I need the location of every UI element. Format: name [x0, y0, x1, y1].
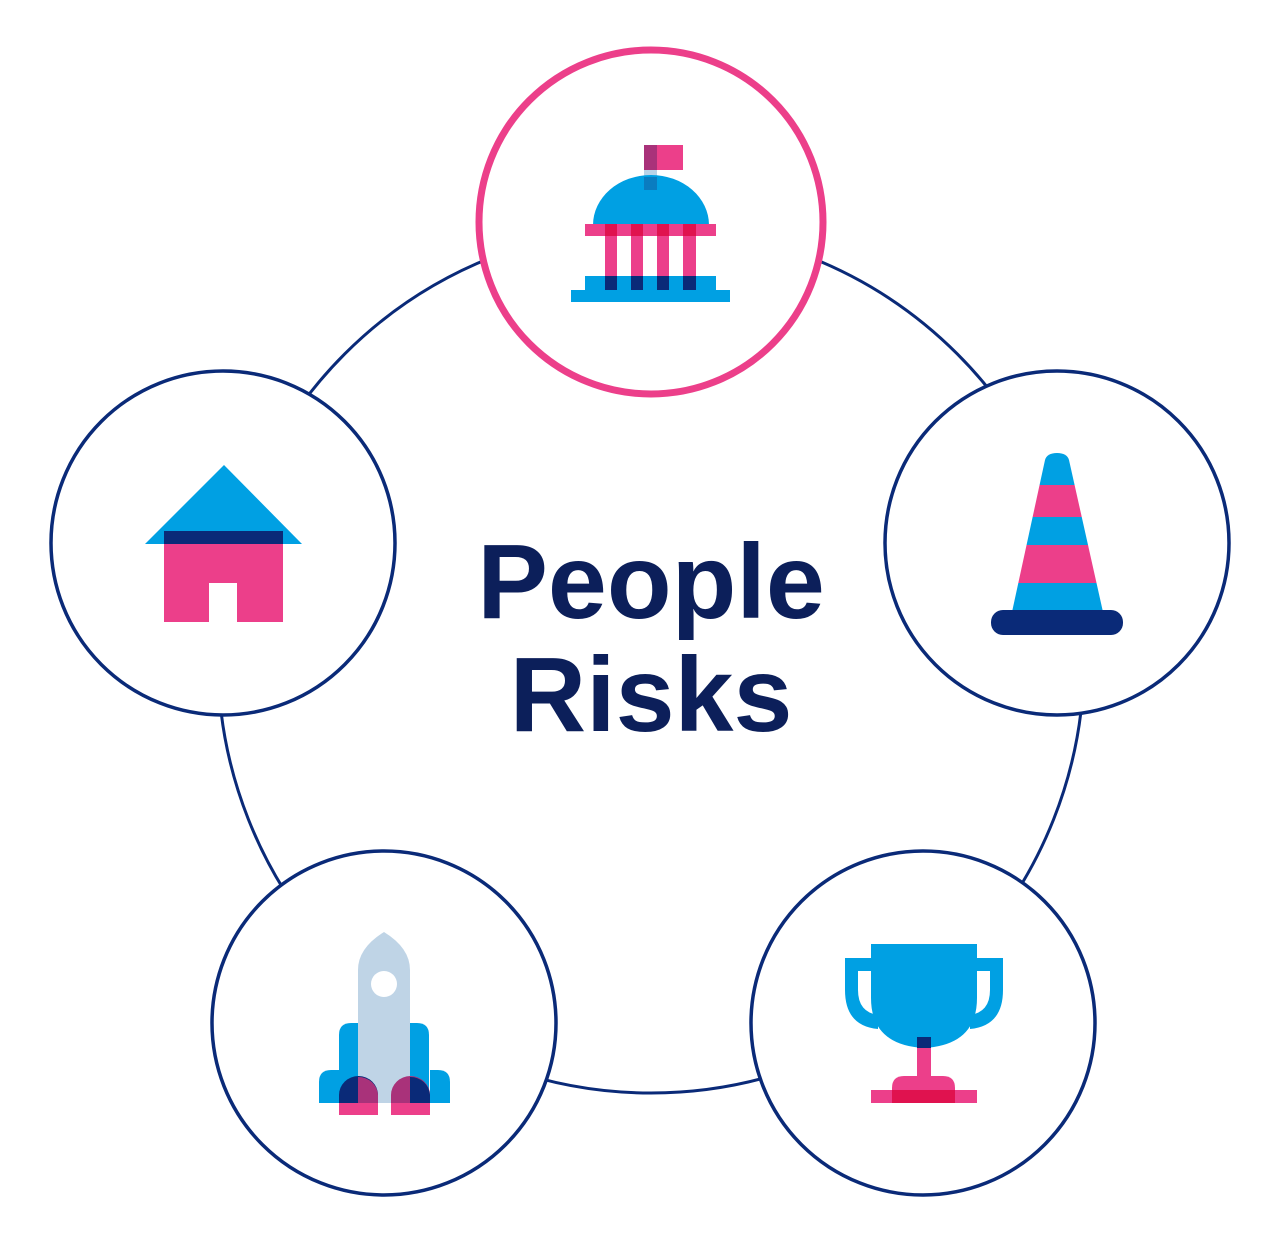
title line 2: Risks [510, 636, 792, 754]
node: rocket (bottom left) [212, 851, 556, 1195]
ring connecting nodes [218, 227, 1084, 1093]
icon: house [145, 465, 302, 622]
node: trophy (bottom right) [751, 851, 1095, 1195]
icon: rocket [319, 932, 450, 1115]
icon: capitol building [571, 145, 730, 302]
icon: trophy [845, 944, 1003, 1103]
icon: traffic cone [991, 450, 1123, 635]
node: cone (right) [885, 371, 1229, 715]
title: People [477, 523, 825, 641]
node: home (left) [51, 371, 395, 715]
node: government (top) [479, 50, 823, 394]
